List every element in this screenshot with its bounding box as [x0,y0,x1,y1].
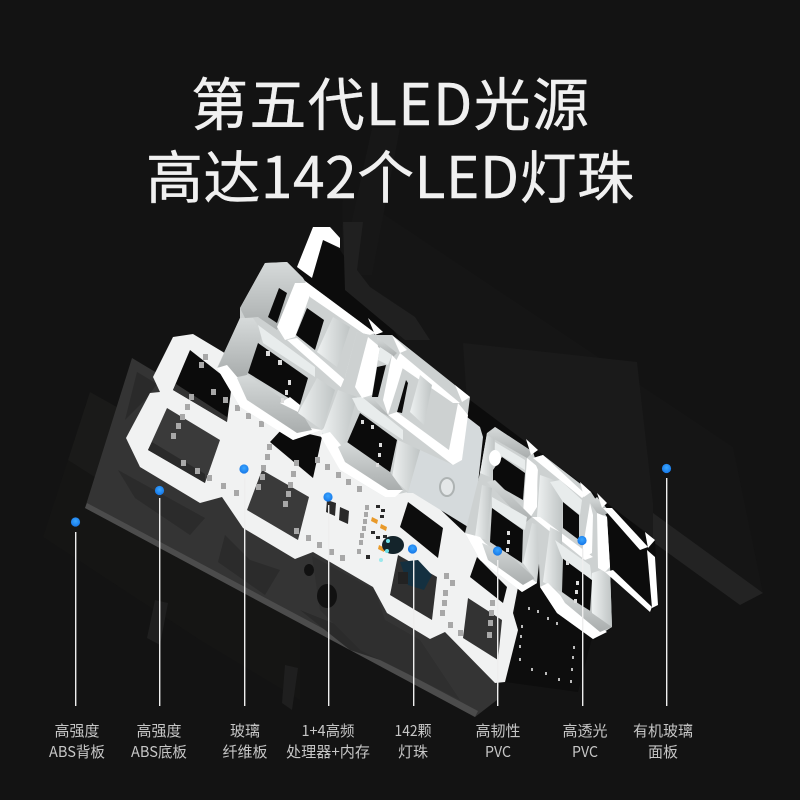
label: translucent PVC [562,720,608,762]
digit 4 [532,455,612,639]
black backing behind digits [220,240,658,640]
white oval [489,450,501,466]
label: ABS base: 高强度 [136,720,182,741]
digit 1 silhouette [217,262,375,440]
label: translucent PVC: PVC [572,741,598,762]
label: processor and memory [286,720,370,762]
label: processor and memory: 处理器+内存 [286,741,370,762]
window LEDs [361,420,382,467]
tips [368,318,383,335]
callout: translucent PVC [577,536,587,706]
ghost frame above digits [343,222,430,340]
tip [580,482,591,497]
callout: ABS base [155,486,164,706]
label: acrylic panel: 有机玻璃 [633,720,693,741]
label: fiberglass board: 玻璃 [230,720,260,741]
callout: tough PVC [493,546,502,706]
plate ring hole [440,478,454,496]
label: tough PVC: PVC [485,741,511,762]
LED chips [171,354,495,638]
label: 142 LED beads: 142颗 [394,720,432,741]
black circuit board [505,583,592,692]
top segment [297,227,340,278]
digit 2 silhouette [322,332,470,497]
label: processor and memory: 1+4高频 [302,720,354,741]
label: ABS backplate: ABS背板 [49,741,105,762]
label: fiberglass board: 纤维板 [222,741,268,762]
callout: LED beads [408,544,417,706]
callout: acrylic panel [662,464,671,706]
label: 142 LED beads: 灯珠 [398,741,428,762]
tip [526,439,538,455]
rear acrylic panel [43,128,763,700]
upper left frame [240,262,303,330]
support struts [147,600,298,710]
label: fiberglass board [222,720,268,762]
window LEDs [506,531,510,552]
digit 1 [217,227,375,440]
callout: processor [323,492,333,706]
digit 3 [465,427,543,592]
lower frame [218,318,263,377]
white fiberglass PCB [126,334,518,683]
window LEDs [266,351,291,403]
label: ABS base [131,720,187,762]
label: tough PVC [475,720,521,762]
digit 3 silhouette [465,427,538,592]
teal components [379,536,432,590]
digit 5 [597,493,658,612]
ABS base plate [85,358,505,717]
label: acrylic panel [633,720,693,762]
base screw holes [304,564,337,608]
digit 2 [320,318,470,497]
label: ABS backplate [49,720,105,762]
label: translucent PVC: 高透光 [562,720,608,741]
label: ABS backplate: 高强度 [54,720,100,741]
callout: ABS backplate [71,517,80,706]
light grey mounting plate [395,383,483,530]
capacitors orange [371,517,387,552]
label: 142 LED beads [394,720,432,762]
title: 高达142个LED灯珠 [146,133,634,215]
label: acrylic panel: 面板 [648,741,678,762]
title [146,60,634,215]
label: ABS base: ABS底板 [131,741,187,762]
label: tough PVC: 高韧性 [475,720,521,741]
processor chips [326,500,387,559]
pcb windows [148,350,507,660]
title: 第五代LED光源 [191,60,589,142]
digit 4 silhouette [533,455,612,639]
window LEDs [566,561,579,603]
callout: fiberglass [239,464,249,706]
